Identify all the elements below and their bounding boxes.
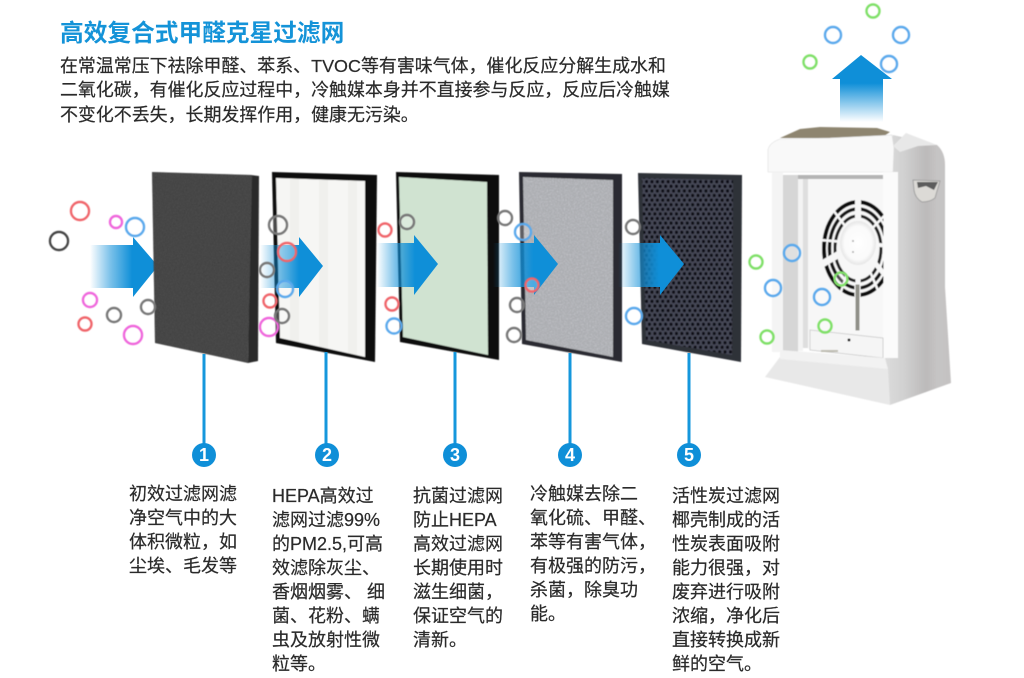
description 2: 菌、花粉、螨 [272, 606, 380, 626]
description 5: 能力很强，对 [672, 558, 780, 578]
clean particles: blue [126, 27, 909, 334]
description 4: 有极强的防污， [530, 556, 656, 576]
purifier left column [772, 172, 783, 352]
description 2: 效滤除灰尘、 [272, 558, 380, 578]
description 3 [413, 486, 503, 650]
description 2: 滤网过滤99% [272, 510, 380, 530]
lower tray [810, 330, 883, 358]
purifier side top cap [893, 133, 937, 152]
arrow: clean air upward [832, 55, 892, 122]
description 5: 废弃进行吸附 [672, 582, 780, 602]
recess left [783, 175, 798, 353]
description 3: 高效过滤网 [413, 534, 503, 554]
number badge 3 [443, 443, 467, 467]
tray slot left [821, 350, 838, 352]
intro paragraph [60, 56, 670, 125]
number badge 1 [192, 443, 216, 467]
air purifier [765, 127, 951, 405]
recess shade [803, 176, 808, 348]
number badge 4: 4 [565, 445, 575, 465]
description 2: 虫及放射性微 [272, 630, 380, 650]
tray slot right [870, 358, 881, 360]
description 2: 的PM2.5,可高 [272, 534, 383, 554]
number badge 3: 3 [450, 445, 460, 465]
description 5: 浓缩，净化后 [672, 606, 780, 626]
description 3: 抗菌过滤网 [413, 486, 503, 506]
filter 4: cold catalyst filter [519, 172, 622, 362]
intro paragraph: 不变化不丢失，长期发挥作用，健康无污染。 [60, 105, 419, 125]
number badge 2: 2 [322, 445, 332, 465]
description 2: 粒等。 [272, 654, 326, 674]
description 4: 氧化硫、甲醛、 [530, 508, 656, 528]
dirty particles: magenta [83, 216, 278, 344]
right column [883, 172, 898, 358]
description 3: 滋生细菌， [413, 582, 503, 602]
description 4: 苯等有害气体， [530, 532, 656, 552]
group: filter panels [152, 172, 742, 363]
arrow: into filter 1 [90, 237, 158, 297]
sensor dot [848, 338, 850, 342]
description 1: 净空气中的大 [129, 508, 237, 528]
dirty particles: gray [50, 211, 640, 342]
description 2 [272, 486, 385, 674]
arrow: through filter 2 [260, 237, 323, 297]
description 4: 杀菌，除臭功 [530, 580, 638, 600]
hub dot upper [852, 240, 854, 242]
intro paragraph: 在常温常压下祛除甲醛、苯系、TVOC等有害味气体，催化反应分解生成水和 [60, 56, 666, 76]
handle [913, 180, 940, 202]
description 2: 香烟烟雾、 细 [272, 582, 385, 602]
description 5 [672, 486, 780, 674]
dirty particles: red [71, 202, 538, 330]
leader lines from filters to numbers [204, 352, 689, 445]
number badge 5: 5 [684, 445, 694, 465]
purifier side [885, 135, 951, 405]
diagram artwork: filters, arrows, particles, purifier [48, 2, 952, 444]
filter 1: foam pre-filter [152, 172, 259, 363]
number badge 2 [315, 443, 339, 467]
description 5: 直接转换成新 [672, 630, 780, 650]
description 1 [129, 484, 237, 576]
description 5: 鲜的空气。 [672, 654, 762, 674]
intro paragraph: 二氧化碳，有催化反应过程中，冷触媒本身并不直接参与反应，反应后冷触媒 [60, 80, 670, 100]
panel top shadow [798, 175, 883, 179]
filter 2: HEPA filter [272, 172, 377, 362]
base top highlight [780, 350, 888, 369]
recess strip [798, 175, 803, 351]
description 4: 能。 [530, 604, 566, 624]
description 1: 尘埃、毛发等 [129, 556, 237, 576]
description 1: 初效过滤网滤 [129, 484, 237, 504]
description 5: 活性炭过滤网 [672, 486, 780, 506]
filter 5: activated carbon filter [638, 173, 742, 362]
filter 3: antibacterial filter [396, 172, 499, 360]
handle cavity [917, 182, 938, 190]
description 1: 体积微粒，如 [129, 532, 237, 552]
inner panel [808, 179, 883, 349]
description 4 [530, 484, 656, 624]
description 5: 椰壳制成的活 [672, 510, 780, 530]
description 5: 性炭表面吸附 [672, 534, 780, 554]
power cord [855, 284, 860, 331]
number badge 1: 1 [199, 445, 209, 465]
description 3: 保证空气的 [413, 606, 503, 626]
description 2: HEPA高效过 [272, 486, 374, 506]
description 4: 冷触媒去除二 [530, 484, 638, 504]
description 3: 防止HEPA [413, 510, 497, 530]
arrow: through filter 5 [618, 235, 684, 295]
description 3: 长期使用时 [413, 558, 503, 578]
description 3: 清新。 [413, 630, 467, 650]
number badge 4 [558, 443, 582, 467]
number badge 5 [677, 443, 701, 467]
purifier brown top panel [780, 127, 890, 138]
base [765, 357, 890, 405]
title: 高效复合式甲醛克星过滤网 [60, 21, 344, 47]
clean particles: green [750, 4, 880, 344]
fan grille [821, 200, 884, 298]
hub dot lower [852, 251, 854, 253]
arrow: through filter 3 [377, 235, 438, 295]
arrow: through filter 4 [493, 235, 558, 295]
purifier front top band [768, 135, 894, 172]
group: air particles [50, 4, 909, 344]
